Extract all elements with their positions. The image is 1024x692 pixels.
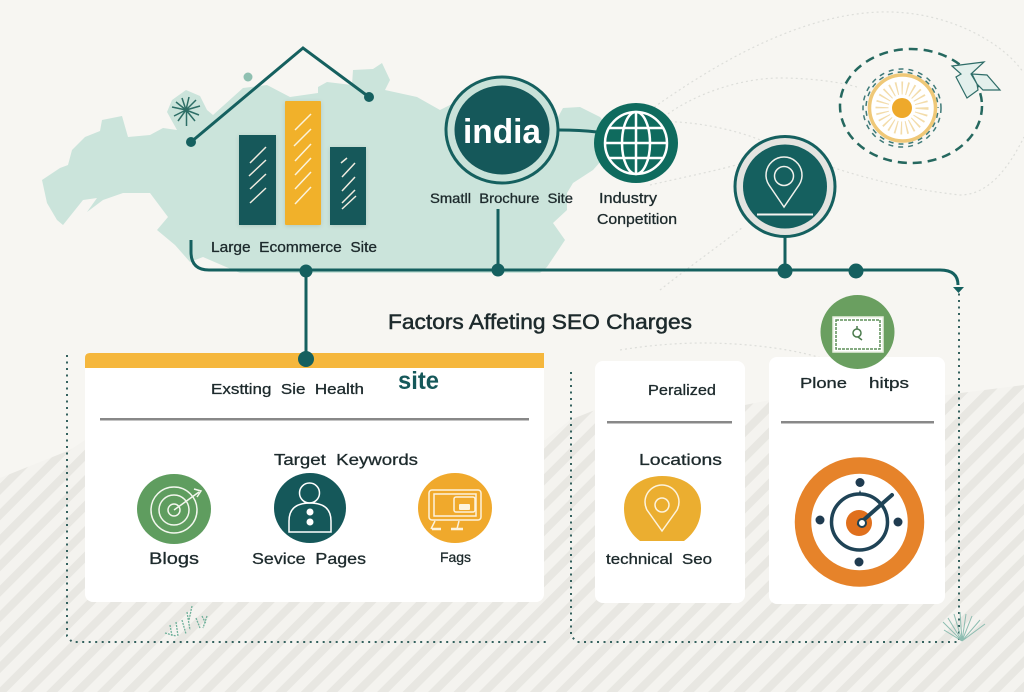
icon: target [137, 474, 211, 544]
label: small brochure site: Smatll Brochure Site [430, 190, 573, 206]
connector node [298, 351, 314, 367]
icon: grass bottom left [165, 606, 207, 636]
label: blogs: Blogs [149, 549, 199, 568]
icon: palm tree [172, 97, 200, 126]
roof line chart [186, 48, 374, 147]
connector timeline [191, 130, 964, 358]
icon: location pin badge [735, 136, 835, 236]
panel: phone and https [769, 357, 945, 604]
text: locations: Locations [639, 452, 722, 469]
icon: speed gauge [803, 466, 916, 578]
label: service pages: Sevice Pages [252, 551, 366, 568]
icon: paper plane [952, 62, 1000, 98]
icon: person [274, 473, 346, 543]
icon: globe [594, 103, 678, 183]
text: personalized: Peralized [648, 382, 716, 399]
text: site logo: site [398, 367, 439, 395]
icon: monitor [418, 473, 492, 543]
label: large ecommerce site: Large Ecommerce Site [211, 240, 377, 256]
icon: banknote [820, 295, 894, 369]
bar chart [239, 101, 366, 225]
icon: location pin [624, 476, 701, 541]
bar: right [330, 147, 366, 225]
map of India [42, 63, 620, 273]
bar: centre [285, 101, 321, 225]
title: Factors Affeting SEO Charges [388, 311, 692, 334]
icon: sun gear [840, 49, 982, 163]
text: existing site health: Exstting Sie Health [211, 381, 364, 398]
label: industry competition [597, 191, 677, 228]
small dot [244, 72, 252, 82]
text: target keywords: Target Keywords [274, 452, 418, 469]
text: plone hitps [800, 375, 909, 392]
panel: locations [595, 361, 745, 603]
dotted frames [67, 292, 959, 642]
icon: palm bottom right [943, 612, 985, 641]
icon: india badge: india [463, 113, 542, 151]
icon: india badge [446, 77, 558, 183]
label: industry competition: Industry [599, 191, 658, 207]
text: plone hitps: hitps [869, 375, 909, 392]
panel top band [85, 353, 544, 368]
panel: site health and keywords [85, 351, 544, 602]
label: faqs: Fags [440, 549, 471, 565]
label: technical seo: technical Seo [606, 551, 712, 568]
text: plone hitps: Plone [800, 375, 847, 392]
label: industry competition: Conpetition [597, 212, 677, 228]
bar: left [239, 135, 276, 225]
